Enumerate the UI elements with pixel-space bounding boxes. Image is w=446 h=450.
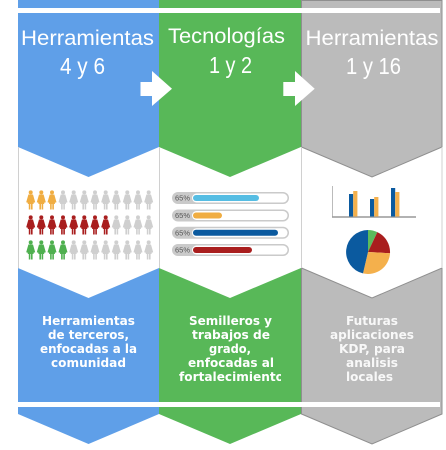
text: gray column description: locales — [346, 369, 393, 384]
panel: blue column — [18, 0, 159, 444]
text: green column description: enfocadas al — [188, 355, 274, 370]
heading: Herramientas 4 y 6: 4 y 6 — [60, 53, 105, 79]
heading: Herramientas 1 y 16 — [306, 26, 438, 79]
text: blue column description: Herramientas — [42, 313, 135, 328]
panel: gray column — [302, 0, 442, 444]
text: green column description: grado, — [209, 341, 251, 356]
row: orange 3 of 12 — [26, 190, 153, 210]
bar: orange 65%: 65% — [175, 211, 190, 220]
arrow: green to gray — [283, 71, 315, 106]
heading: Herramientas 4 y 6: Herramientas — [21, 26, 154, 50]
text: gray column description: analisis — [346, 355, 398, 370]
bar: light blue 65%: 65% — [175, 194, 190, 203]
bar: red 65%: 65% — [175, 246, 190, 255]
chart: progress bars — [172, 192, 289, 256]
bar: dark blue 65%: 65% — [175, 228, 190, 238]
heading: Tecnologías 1 y 2 — [168, 24, 285, 78]
text: green column description: Semilleros y — [189, 313, 272, 328]
text: green column description — [179, 316, 281, 381]
bottom white strip — [18, 402, 440, 407]
text: blue column description — [40, 313, 137, 370]
pictogram: people rows — [26, 190, 153, 260]
heading: Tecnologías 1 y 2: Tecnologías — [168, 24, 285, 48]
panel: green column — [159, 0, 301, 444]
heading: Herramientas 4 y 6 — [21, 26, 154, 79]
row: red 8 of 12 — [26, 215, 153, 234]
text: green column description: fortalecimiento — [179, 369, 284, 384]
top white strip — [18, 8, 440, 13]
arrow: blue to green — [140, 71, 172, 106]
text: blue column description: enfocadas a la — [40, 341, 137, 356]
text: green column description: trabajos de — [192, 327, 270, 342]
text: gray column description: Futuras — [346, 313, 398, 328]
chart: grouped bars — [332, 186, 416, 217]
row: green 4 of 12 — [26, 240, 153, 260]
text: gray column description: aplicaciones — [330, 327, 414, 342]
text: blue column description: comunidad — [51, 355, 126, 370]
heading: Herramientas 1 y 16: Herramientas — [306, 26, 438, 50]
text: gray column description: KDP, para — [339, 341, 405, 356]
heading: Tecnologías 1 y 2: 1 y 2 — [209, 52, 252, 78]
text: blue column description: de terceros, — [48, 327, 129, 342]
heading: Herramientas 1 y 16: 1 y 16 — [346, 53, 401, 79]
chart: pie — [346, 230, 390, 274]
text: gray column description — [330, 313, 414, 384]
